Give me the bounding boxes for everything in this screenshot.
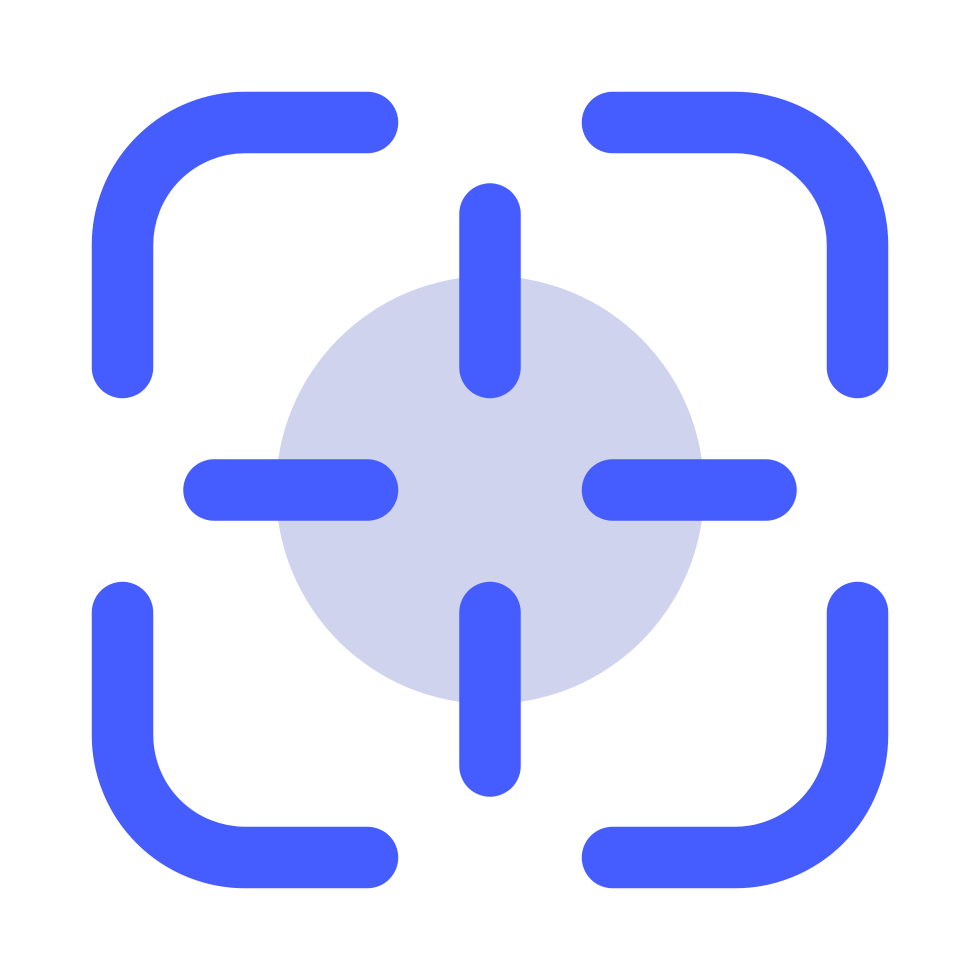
tick: top bbox=[459, 214, 521, 368]
icon: viewfinder corners bbox=[122, 122, 858, 858]
tick: right bbox=[612, 459, 766, 521]
corner: top left bbox=[122, 122, 368, 368]
corner: bottom right bbox=[612, 612, 858, 858]
corner: top right bbox=[612, 122, 858, 368]
tick: bottom bbox=[459, 612, 521, 766]
tick: left bbox=[214, 459, 368, 521]
icon: crosshair ticks bbox=[214, 214, 766, 766]
corner: bottom left bbox=[122, 612, 368, 858]
icon: center circle bbox=[276, 276, 704, 704]
